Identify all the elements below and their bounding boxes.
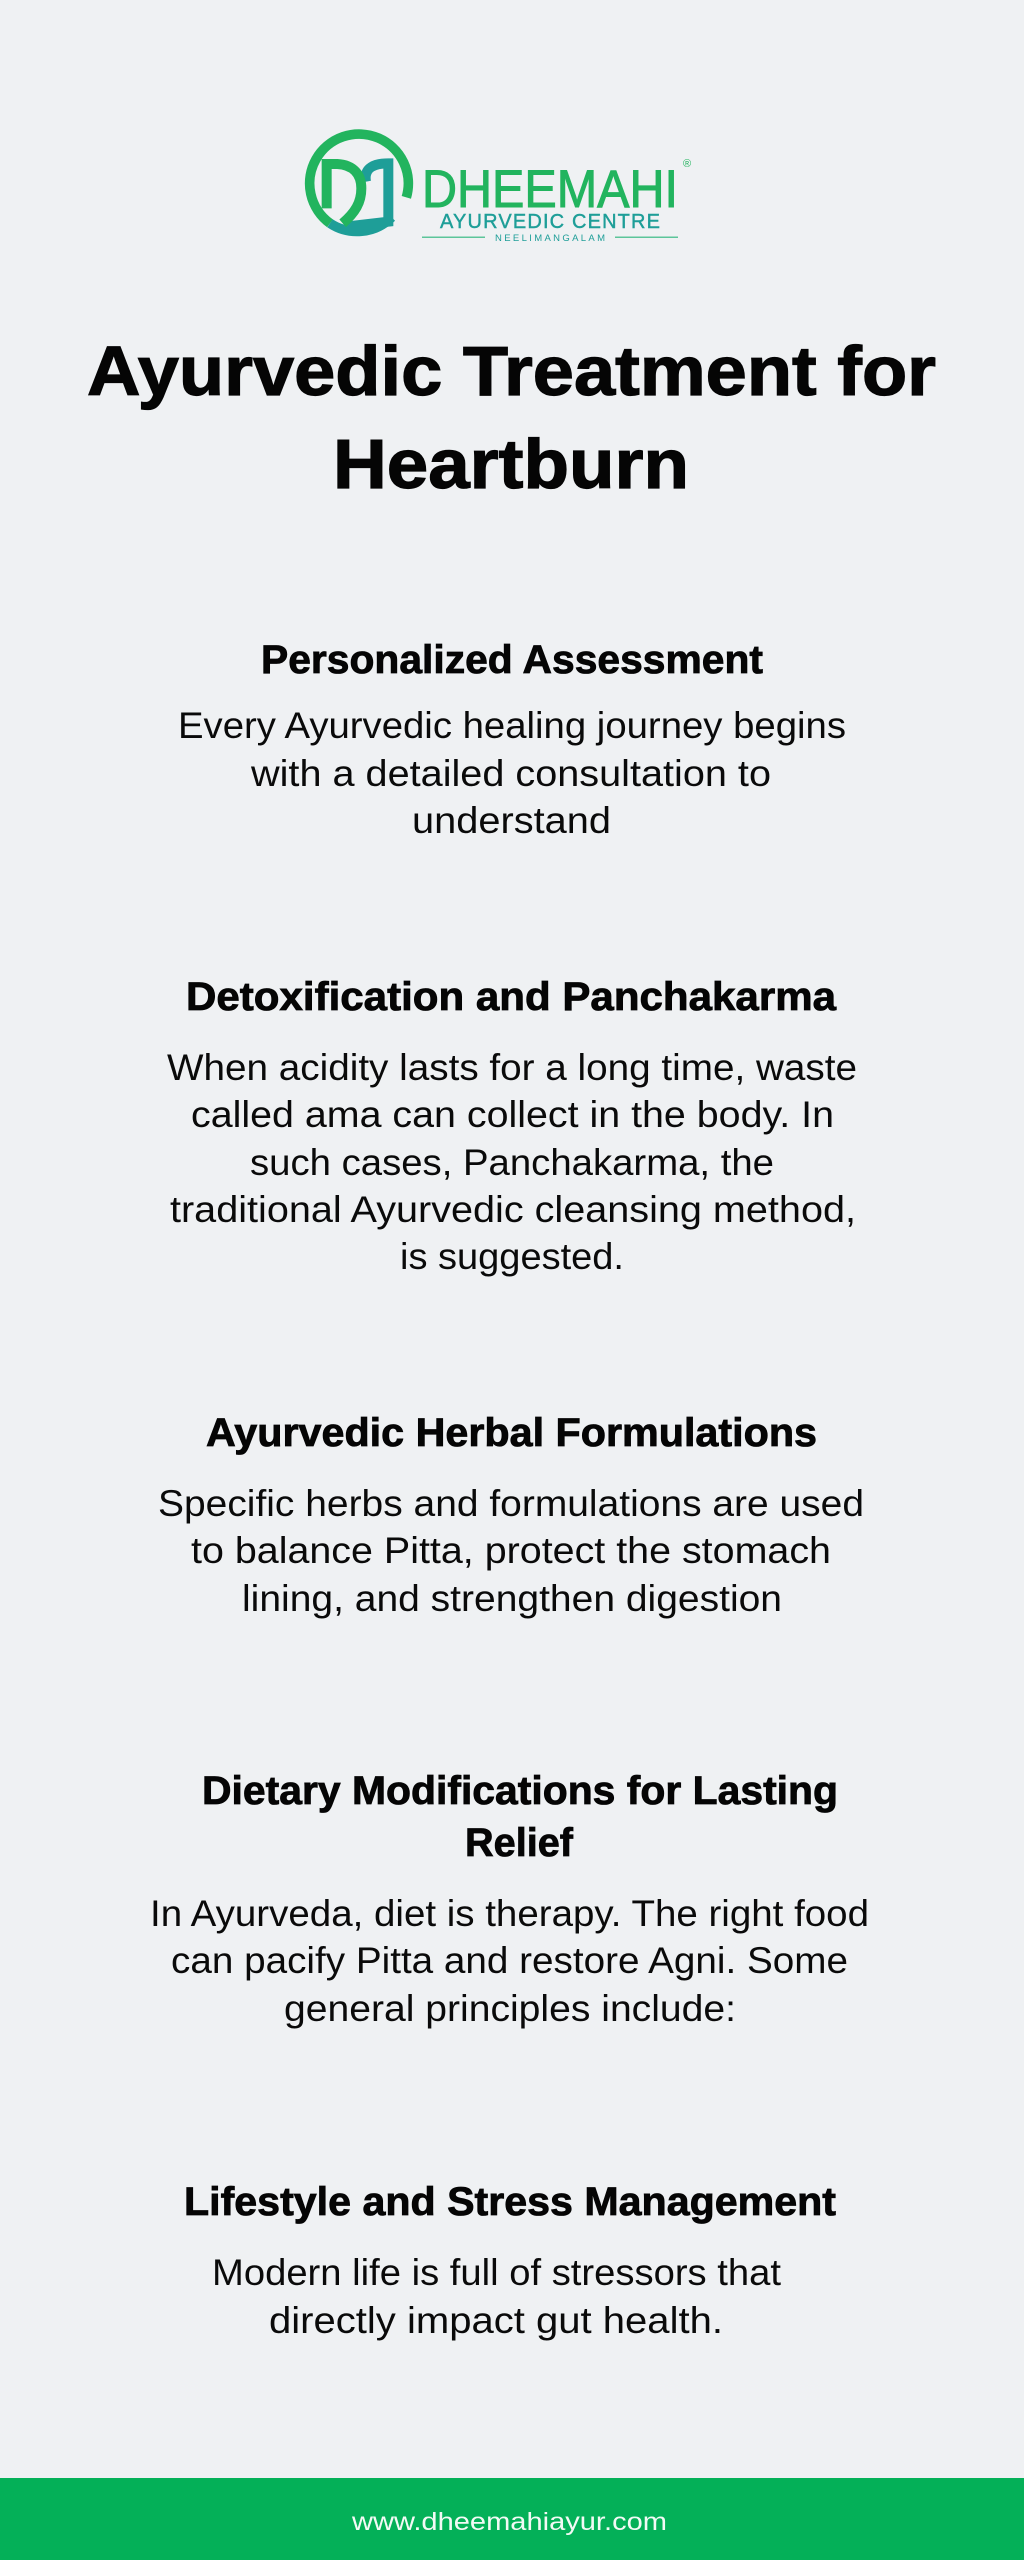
heading: Relief — [465, 1821, 574, 1865]
body text: Specific herbs and formulations are used — [158, 1483, 864, 1524]
body text — [150, 1893, 869, 2029]
logo location: NEELIMANGALAM — [495, 233, 605, 244]
icon: logo mark — [310, 134, 408, 231]
body text: with a detailed consultation to — [250, 753, 771, 794]
body text: general principles include: — [284, 1988, 736, 2029]
footer bar — [0, 2478, 1024, 2560]
body text: When acidity lasts for a long time, waste — [167, 1047, 857, 1088]
body text — [167, 1047, 857, 1277]
logo: Dheemahi Ayurvedic Centre — [310, 134, 691, 244]
logo subtitle: AYURVEDIC CENTRE — [440, 211, 660, 233]
section: Lifestyle and Stress Management — [184, 2180, 836, 2341]
section: Personalized Assessment — [178, 638, 846, 841]
body text: In Ayurveda, diet is therapy. The right food — [150, 1893, 869, 1934]
heading: Detoxification and Panchakarma — [186, 975, 837, 1019]
body text — [212, 2252, 782, 2341]
section: Ayurvedic Herbal Formulations — [158, 1411, 864, 1619]
body text: Every Ayurvedic healing journey begins — [178, 705, 846, 746]
body text: to balance Pitta, protect the stomach — [191, 1530, 831, 1571]
section: Detoxification and Panchakarma — [167, 975, 857, 1277]
logo registered mark: ® — [683, 158, 691, 170]
heading: Personalized Assessment — [261, 638, 763, 682]
title: Heartburn — [333, 425, 689, 503]
heading: Lifestyle and Stress Management — [184, 2180, 836, 2224]
logo name: DHEEMAHI — [422, 160, 678, 219]
body text: Modern life is full of stressors that — [212, 2252, 782, 2293]
heading: Dietary Modifications for Lasting — [202, 1769, 838, 1813]
heading: Ayurvedic Herbal Formulations — [206, 1411, 817, 1455]
body text — [158, 1483, 864, 1619]
title — [87, 332, 936, 503]
title: Ayurvedic Treatment for — [87, 332, 936, 410]
body text: traditional Ayurvedic cleansing method, — [170, 1189, 856, 1230]
body text: lining, and strengthen digestion — [242, 1578, 782, 1619]
body text — [178, 705, 846, 841]
body text: is suggested. — [400, 1236, 624, 1277]
body text: such cases, Panchakarma, the — [250, 1142, 774, 1183]
heading — [202, 1769, 838, 1865]
body text: can pacify Pitta and restore Agni. Some — [171, 1940, 848, 1981]
body text: directly impact gut health. — [269, 2300, 723, 2341]
section: Dietary Modifications for Lasting Relief — [150, 1769, 869, 2029]
body text: understand — [412, 800, 611, 841]
footer website: www.dheemahiayur.com — [351, 2508, 667, 2536]
body text: called ama can collect in the body. In — [191, 1094, 834, 1135]
